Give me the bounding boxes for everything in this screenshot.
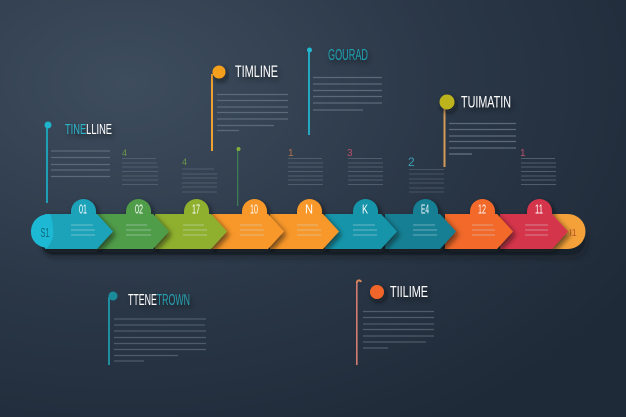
segment 6 teal: K (362, 202, 368, 216)
segment 3 lime: 17 (192, 202, 200, 216)
callout: ttenetrown: TTENETROWN (128, 292, 190, 309)
segment 2 green: 02 (135, 202, 143, 216)
callout: tiilime: TIILIME (390, 284, 428, 301)
segment 1 teal: 01 (79, 202, 87, 216)
small note 2 (182, 157, 217, 192)
segment 8 orange-red (445, 199, 513, 249)
small note 5: 3 (347, 148, 353, 159)
small note 3 (236, 147, 240, 206)
segment 7 dark teal (385, 199, 456, 249)
small note 7 (520, 148, 556, 184)
segment 9 red (500, 199, 568, 249)
segment 1 teal (45, 199, 113, 249)
end cap: I1 (570, 228, 577, 239)
end cap (550, 214, 586, 249)
small note 6: 2 (408, 155, 415, 169)
segment 5 orange: N (305, 202, 313, 216)
small note 5 (347, 148, 383, 184)
callout: timeline left (44, 121, 112, 203)
bar shadow (40, 222, 585, 255)
small note 6 (408, 155, 444, 192)
callout: gourad (307, 47, 382, 135)
segment 3 lime (155, 199, 227, 249)
callout: timeline orange: TIMLINE (235, 63, 278, 81)
segment captions (71, 225, 548, 235)
callout: timeline left: TINELLINE (65, 121, 112, 138)
segment 4 orange: 10 (250, 202, 258, 216)
segment 4 orange (212, 199, 284, 249)
segment 9 red: 11 (535, 202, 543, 216)
callout: timeline orange (211, 63, 288, 151)
segment 6 teal (325, 199, 397, 249)
small note 1: 4 (122, 148, 127, 158)
callout: tuimatin: TUIMATIN (461, 92, 511, 112)
callout: tuimatin (440, 92, 516, 167)
callout: ttenetrown (108, 292, 206, 365)
callout: gourad: GOURAD (328, 47, 368, 64)
segment 5 orange (270, 199, 339, 249)
small note 1 (122, 148, 158, 184)
small note 2: 4 (182, 157, 187, 167)
segment 8 orange-red: 12 (478, 202, 486, 216)
small note 4: 1 (288, 148, 294, 159)
timeline bar (31, 199, 586, 249)
small note 4 (288, 148, 323, 184)
callout: tiilime (356, 280, 434, 365)
start cap (31, 214, 53, 248)
segment 2 green (97, 199, 169, 249)
start cap: S1 (40, 225, 50, 240)
segment 7 dark teal: E4 (421, 202, 429, 216)
small note 7: 1 (520, 148, 526, 159)
